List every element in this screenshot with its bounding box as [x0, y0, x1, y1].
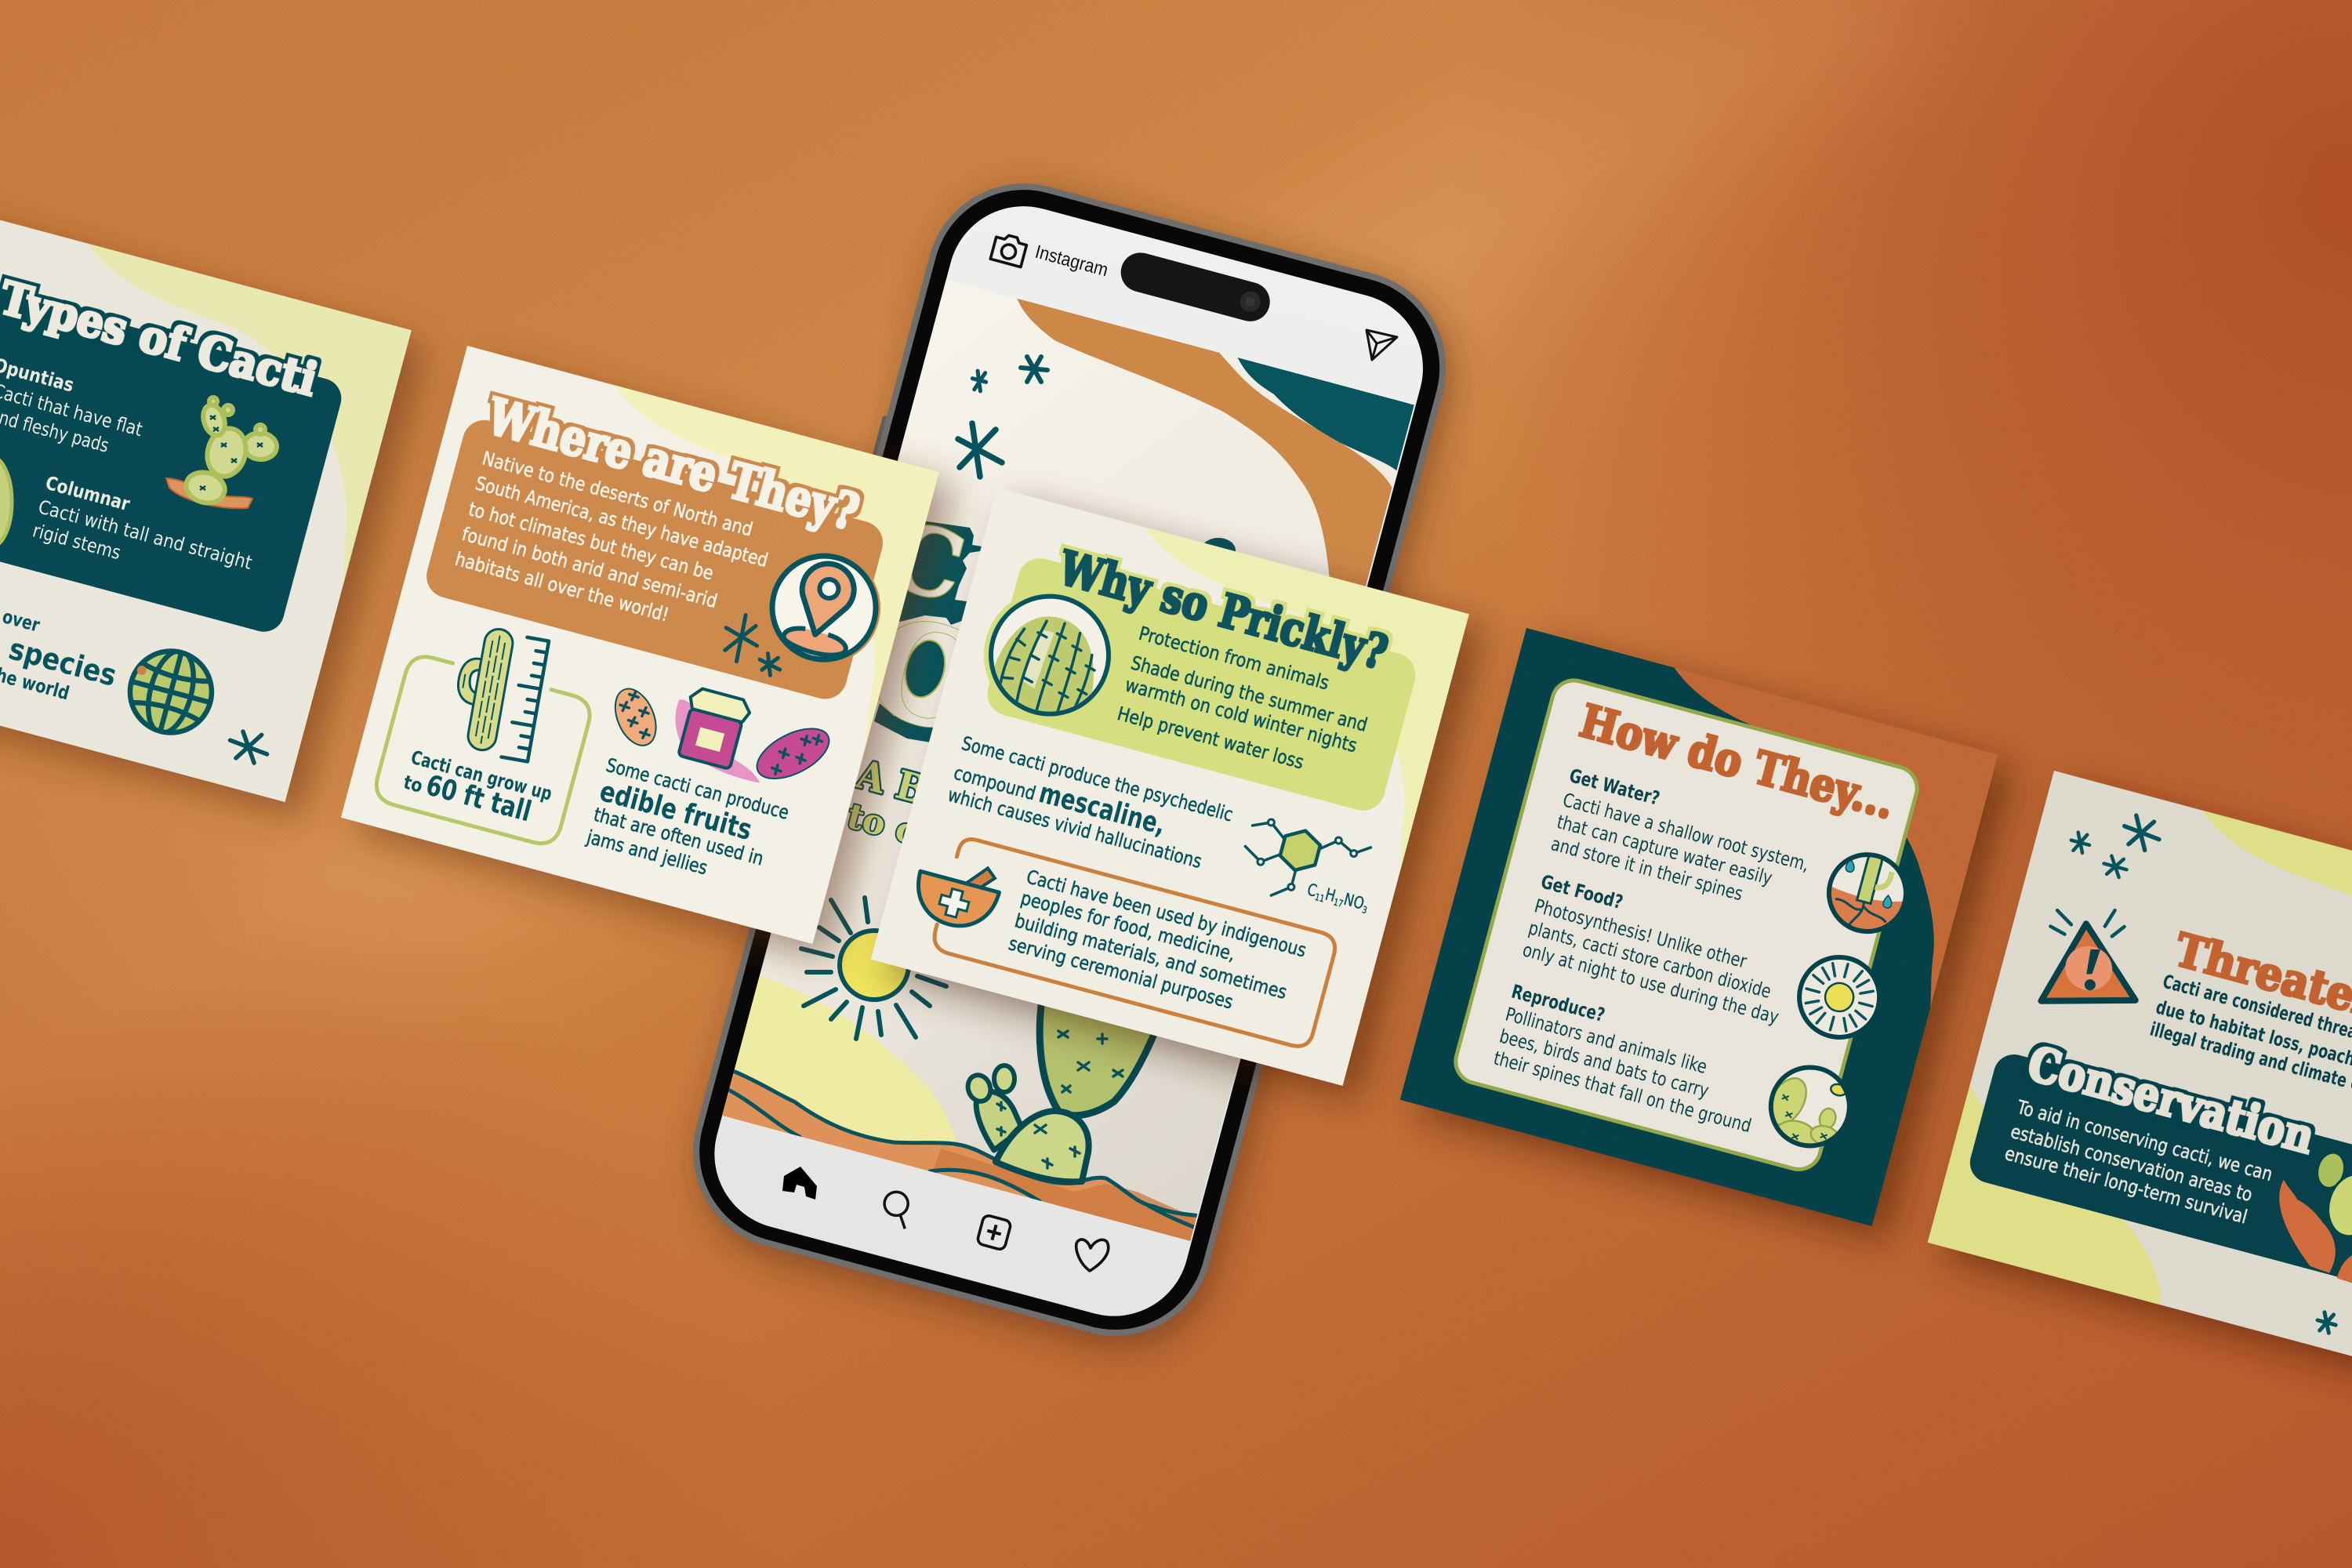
text: height: 60 ft tall [423, 769, 535, 828]
label: formula: 11 [1314, 891, 1326, 905]
text: edible fruits: Some cacti can produce [604, 754, 791, 824]
stat: species [0, 605, 126, 715]
text: mescaline: which causes vivid hallucinations [946, 784, 1204, 873]
icon: molecule [1235, 815, 1371, 917]
icon: saguaro cactus [448, 623, 515, 753]
icon: barrel cactus [969, 575, 1131, 735]
label: formula: 17 [1332, 896, 1345, 909]
small teal arc behind card [1201, 538, 1236, 563]
text: Columnar: Cacti with tall and straight [36, 495, 254, 574]
heading: Where are They? [481, 387, 865, 543]
callout text: building materials, and sometimes [1012, 909, 1289, 1004]
icon: sun [1791, 948, 1889, 1046]
illustrations in page coordinates [0, 397, 278, 547]
instagram bottom nav [782, 1167, 1109, 1271]
text: mescaline: Some cacti produce the psychedelic [960, 732, 1236, 826]
icon: search [879, 1189, 913, 1229]
heading: Types of Cacti [0, 270, 323, 407]
text: Reproduce: Reproduce? [1509, 980, 1607, 1026]
card 1: Types of Cacti [0, 204, 430, 818]
post title letters: C [850, 584, 997, 768]
label: Instagram: Instagram [1033, 241, 1110, 281]
stat: species: species [5, 631, 120, 693]
card 3: Why so Prickly [868, 488, 1488, 1102]
callout text: serving ceremonial purposes [1007, 932, 1236, 1014]
body text: habitats all over the world! [453, 548, 671, 626]
text: conservation body: ensure their long-term survival [2002, 1142, 2249, 1229]
text: conservation body: To aid in conserving cacti, we can [2014, 1096, 2275, 1185]
orange wave [1017, 298, 1392, 586]
inner panel [1451, 676, 1922, 1174]
icon: send [1367, 330, 1397, 360]
text: edible fruits: jams and jellies [584, 826, 710, 879]
ground [706, 1068, 1207, 1333]
lime hill [690, 960, 958, 1160]
text: Get Food [1520, 870, 1799, 1029]
post title letters: A B [851, 750, 932, 814]
teal panel [0, 275, 346, 637]
asterisks [1965, 800, 2352, 1334]
post title letters: to c [843, 796, 921, 853]
body text [1115, 622, 1377, 787]
icon: camera [990, 232, 1028, 267]
body text: found in both arid and semi-arid [459, 523, 720, 612]
text: edible fruits [584, 753, 791, 896]
text: edible fruits: that are often used in [591, 804, 766, 870]
text: conservation body: establish conservation areas to [2009, 1120, 2255, 1206]
asterisks [717, 611, 791, 677]
icon: hands and cactus [2261, 1142, 2352, 1289]
teal wave [1237, 358, 1414, 470]
icon: edible fruits and jam [595, 664, 844, 804]
icon: pollinators [1754, 1056, 1859, 1167]
label: formula: 3 [1361, 904, 1368, 916]
text: Get Water: and store it in their spines [1548, 833, 1745, 905]
text: height [401, 746, 554, 833]
post sun [801, 898, 946, 1039]
text: Get Food: plants, cacti store carbon dioxide [1526, 916, 1773, 1003]
body text: Help prevent water loss [1115, 702, 1306, 774]
text: Get Water: that can capture water easily [1555, 811, 1774, 889]
teal panel [1965, 1050, 2352, 1297]
text: edible fruits: edible fruits [597, 775, 755, 847]
body text: warmth on cold winter nights [1123, 673, 1359, 757]
post title letters: C [877, 499, 975, 623]
label: formula: C [1305, 880, 1321, 901]
text: mescaline: mescaline, [1036, 777, 1169, 841]
label: formula: NO [1342, 890, 1367, 913]
text: Reproduce: their spines that fall on the ground [1491, 1047, 1754, 1137]
icon: add [977, 1214, 1011, 1250]
heading: How do They... [1574, 694, 1900, 829]
body text: Protection from animals [1137, 622, 1331, 694]
text: Get Food: Get Food? [1538, 870, 1625, 913]
icon: heart [1076, 1240, 1109, 1271]
icon: opuntia cactus [166, 397, 278, 508]
icon: globe [119, 639, 223, 745]
post asterisks [958, 357, 1047, 477]
text: height: Cacti can grow up [408, 746, 554, 805]
label: formula: H [1323, 884, 1338, 906]
heading: Why so Prickly? [1053, 540, 1393, 681]
callout text [1007, 866, 1308, 1028]
text: Get Water: Cacti have a shallow root system, [1560, 789, 1812, 876]
icon: roots and water [1810, 843, 1925, 956]
phone mockup [627, 157, 1490, 1367]
post cactus [964, 972, 1160, 1181]
text: mescaline [946, 732, 1236, 877]
instagram top bar [990, 232, 1397, 360]
body text: South America, as they have adapted [474, 472, 771, 572]
text: Get Food: only at night to use during the day [1520, 938, 1781, 1029]
text: Reproduce: Pollinators and animals like [1503, 1003, 1709, 1078]
text: height: to [401, 771, 425, 797]
icon: warning triangle [2031, 895, 2157, 1025]
text: Reproduce: bees, birds and bats to carry [1497, 1025, 1711, 1102]
post title letters [843, 499, 997, 853]
stat: species: over [0, 605, 42, 637]
phone post artwork [722, 279, 1414, 1241]
icon: ruler [501, 637, 549, 761]
green panel [982, 554, 1421, 815]
dynamic island [1116, 249, 1274, 325]
asterisk [226, 728, 271, 765]
icon: mortar and pestle [909, 851, 1004, 935]
usage callout box [931, 836, 1338, 1050]
text: Reproduce [1491, 980, 1772, 1137]
card 2: Where are They [338, 346, 958, 960]
body text [453, 447, 777, 648]
callout text: Cacti have been used by indigenous [1024, 866, 1308, 961]
text: Columnar: rigid stems [31, 520, 123, 564]
card 5: Threatened and Conservation [1925, 771, 2352, 1385]
text: Columnar [30, 471, 261, 597]
height callout box [372, 652, 594, 848]
orange panel [422, 416, 887, 704]
text: Get Water [1548, 764, 1818, 920]
text: Get Food: Photosynthesis! Unlike other [1532, 895, 1749, 973]
card 4: How do They [1397, 628, 2017, 1242]
icon: columnar cactus sliver [0, 456, 12, 547]
icon: home [782, 1167, 817, 1200]
body text: Shade during the summer and [1129, 652, 1370, 736]
text: Get Water: Get Water? [1567, 764, 1662, 810]
text: mescaline: compound [952, 762, 1038, 804]
body text: Native to the deserts of North and [480, 447, 755, 541]
text: Opuntias [0, 354, 151, 464]
callout text: peoples for food, medicine, [1018, 887, 1238, 965]
icon: map pin [755, 539, 893, 677]
text: Columnar: Columnar [43, 472, 132, 515]
text: conservation body [2002, 1096, 2275, 1232]
body text: to hot climates but they can be [466, 498, 716, 585]
